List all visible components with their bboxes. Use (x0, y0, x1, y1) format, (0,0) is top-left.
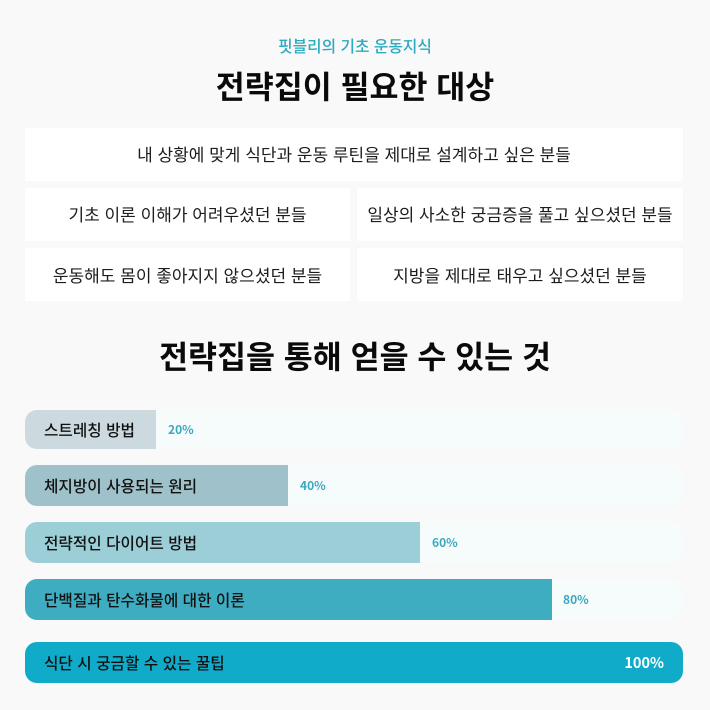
chart: progress bars (25, 410, 683, 683)
bar row: 40%: 체지방이 사용되는 원리 (44, 474, 197, 497)
card: everyday questions (357, 188, 683, 241)
label: 식단 시 궁금할 수 있는 꿀팁 (44, 651, 225, 674)
card: basic theory: 기초 이론 이해가 어려우셨던 분들 (68, 201, 306, 226)
card: burn fat: 지방을 제대로 태우고 싶으셨던 분들 (393, 262, 647, 287)
bar row: 80%: 80% (563, 591, 589, 608)
card: full width: 내 상황에 맞게 식단과 운동 루틴을 제대로 설계하고 싶은 분들 (137, 141, 571, 166)
bar row: 60%: 60% (432, 534, 458, 551)
card: full width (25, 128, 683, 181)
bar row: 20%: 20% (168, 421, 194, 438)
subtitle: 핏블리의 기초 운동지식 (278, 34, 432, 57)
bar row: 20%: 스트레칭 방법 (44, 418, 135, 441)
bar row: 40% (25, 465, 326, 506)
value: 100% (624, 652, 664, 673)
bar row: 60%: 전략적인 다이어트 방법 (44, 531, 197, 554)
bar row: 80%: 단백질과 탄수화물에 대한 이론 (44, 588, 245, 611)
card: basic theory (25, 188, 350, 241)
bar row: 60% (25, 522, 458, 563)
card: burn fat (357, 248, 683, 301)
card: exercise results: 운동해도 몸이 좋아지지 않으셨던 분들 (53, 262, 322, 287)
panel: audience cards (53, 141, 673, 287)
bar row: 100% (25, 642, 683, 683)
card: exercise results (25, 248, 350, 301)
bar row: 80% (25, 579, 589, 620)
bar row: 20% (25, 410, 194, 449)
bar row: 40%: 40% (300, 477, 326, 494)
heading: what you gain: 전략집을 통해 얻을 수 있는 것 (159, 332, 551, 378)
card: everyday questions: 일상의 사소한 궁금증을 풀고 싶으셨던 분들 (367, 201, 673, 226)
heading: target audience: 전략집이 필요한 대상 (216, 62, 494, 108)
